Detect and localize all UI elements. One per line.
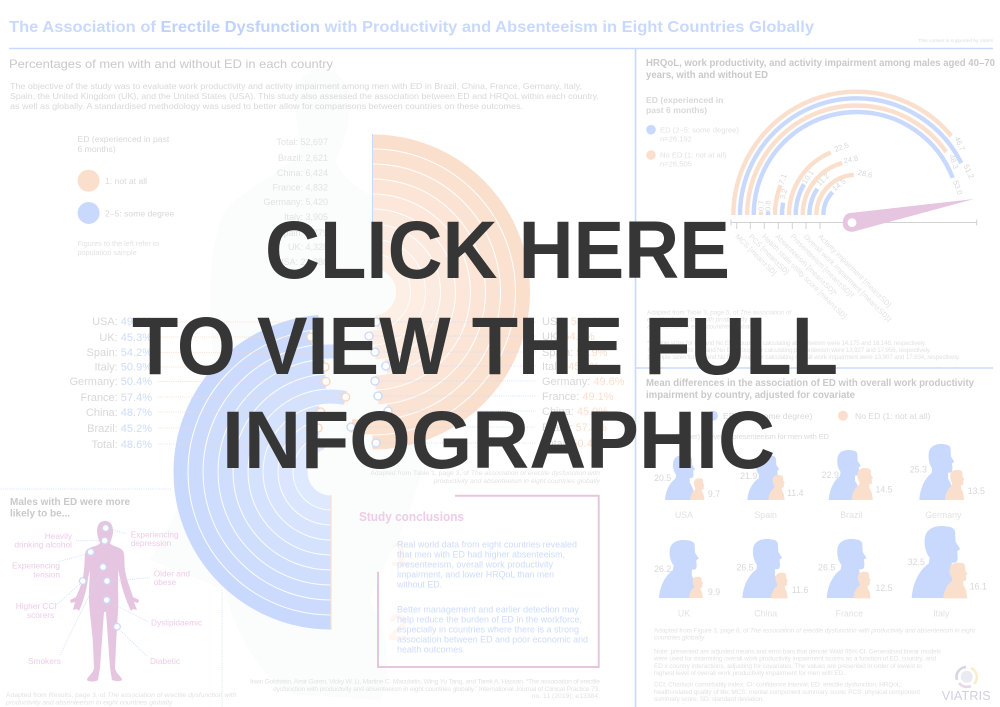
heading: mean differences: Mean differences in the association of ED with overall work productivity — [646, 378, 974, 389]
axis labels — [734, 232, 894, 324]
silhouette values: 11.6 — [792, 585, 808, 595]
silhouette values: 26.5 — [818, 562, 835, 572]
population labels: Spain: 3,779 — [277, 228, 328, 238]
silhouette values: 12.5 — [875, 583, 893, 593]
conclusion 2: health outcomes. — [397, 644, 465, 654]
axis labels: Activity impairment [mean±SD] — [816, 232, 893, 309]
legend: HRQoL: past 6 months) — [646, 105, 707, 115]
call to action overlay: CLICK HERE — [265, 205, 730, 296]
axis labels: Absenteeism [mean±SD]* — [774, 232, 839, 298]
panel: study conclusions — [359, 496, 599, 667]
body labels: drinking alcohol — [14, 540, 72, 550]
conclusion 2: especially in countries where there is a strong — [397, 624, 579, 634]
body labels: obese — [154, 577, 177, 587]
silhouette values: 9.9 — [708, 587, 720, 597]
country percentages: ED — [69, 316, 152, 451]
body labels: Smokers — [28, 656, 61, 666]
notes: highest level of overall work productivity impairment for men with ED. — [654, 670, 845, 677]
objective text: The objective of the study was to evaluate work productivity and activity impairment among men with ED in Brazil, China, France, Germany, Italy, — [10, 81, 582, 91]
country percentages: ED: UK: 45.3% — [99, 332, 152, 344]
silhouette values: 32.5 — [908, 557, 925, 567]
population labels: USA: 21,388 — [277, 257, 328, 267]
country percentages: ED: Total: 48.6% — [91, 439, 152, 451]
country percentages: ED: Brazil: 45.2% — [87, 423, 152, 435]
country percentages: no ED: UK: 54.8% — [542, 331, 595, 343]
body markers — [79, 525, 120, 630]
source: table 1: productivity and absenteeism in eight countries globally — [433, 478, 601, 485]
body labels: scorers — [27, 610, 54, 620]
legend: mean differences — [654, 411, 931, 441]
legend: population chart: ED (experienced in past — [78, 134, 170, 144]
arc value labels: 0.8 — [763, 200, 772, 211]
arc value labels — [756, 135, 976, 211]
ring end markers — [307, 318, 392, 448]
conclusion 2: help reduce the burden of ED in the workforce, — [397, 614, 582, 624]
body labels: Experiencing — [12, 561, 60, 571]
conclusion 1 — [396, 540, 577, 590]
source: table 1: Adapted from Table 1, page 3, of The association of erectile dysfunction with — [370, 470, 600, 477]
body labels: Experiencing — [131, 530, 179, 540]
country percentages: no ED: Brazil: 57.2% — [542, 422, 607, 434]
source: table 3 — [647, 310, 960, 361]
numeral 2: 2 — [388, 607, 408, 648]
conclusion 1: presenteeism, overall work productivity — [397, 560, 553, 570]
radial chart: ED — [180, 322, 482, 630]
heading: HRQoL: years, with and without ED — [646, 70, 768, 81]
country percentages: no ED: Total: 50.4% — [542, 438, 603, 450]
country percentages: no ED: China: 45.9% — [542, 406, 608, 418]
arc value labels: 48.3 — [947, 153, 961, 170]
country names: USA — [675, 510, 693, 520]
conclusion 1: without ED. — [396, 580, 442, 590]
source: table 3: *Sample sizes for ED and No ED groups for calculating absenteeism were 14,175 and 18,148, respectively. — [647, 340, 926, 347]
country percentages: no ED: France: 49.1% — [542, 391, 614, 403]
body labels: Diabetic — [150, 656, 180, 666]
silhouette values: 25.3 — [910, 464, 927, 474]
notes: summary score; SD: standard deviation. — [654, 696, 764, 703]
conclusion 1: impairment, and lower HRQoL than men — [397, 570, 554, 580]
country percentages: no ED: Germany: 49.6% — [542, 376, 625, 388]
legend: population chart: 2–5: some degree — [105, 208, 174, 218]
axis labels: Presenteeism [mean±SD]† — [789, 232, 857, 300]
body labels: tension — [33, 569, 60, 579]
legend: HRQoL — [646, 95, 739, 168]
title: The Association of Erectile Dysfunction with Productivity and Absenteeism in Eight Countries Globally — [9, 19, 814, 36]
source: table 1 — [370, 470, 601, 485]
notes: were used for examining overall work productivity impairment scores as a function of ED, country, and — [653, 656, 936, 663]
country percentages: ED: Germany: 50.4% — [69, 376, 152, 388]
body labels: Heavily — [45, 531, 73, 541]
leader lines: ED percentages — [158, 322, 346, 444]
heading: HRQoL — [646, 58, 995, 81]
notes: Adapted from Figure 3, page 8, of The association of erectile dysfunction with productivity and absenteeism in eight — [654, 628, 976, 634]
arc value labels: 46.7 — [953, 135, 967, 152]
body labels: Dyslipidaemic — [151, 618, 202, 628]
legend: mean differences: Y-axis (higher) = level of presenteeism for men with ED — [654, 432, 830, 441]
heading: percentages: Percentages of men with and without ED in each country — [9, 57, 333, 71]
country names: China — [754, 609, 777, 619]
population labels: Italy: 3,905 — [284, 212, 328, 222]
legend: mean differences: ED (2–5: some degree) — [723, 411, 812, 421]
legend: HRQoL: n=26,192 — [660, 134, 692, 144]
legend: HRQoL: ED (experienced in — [646, 95, 723, 105]
legend: HRQoL: n=26,505 — [660, 160, 692, 168]
radial chart: no ED — [222, 134, 523, 442]
population labels: UK: 4,328 — [288, 242, 328, 252]
objective text: as well as globally. A standardised methodology was used to better allow for comparisons between countries on these outcomes. — [10, 101, 523, 111]
silhouette values: 21.9 — [740, 471, 757, 481]
arc value labels: 22.5 — [833, 140, 850, 154]
country names: Germany — [925, 510, 962, 520]
country percentages: ED: Italy: 50.9% — [94, 362, 152, 374]
panel: study conclusions: Study conclusions — [359, 510, 464, 524]
source: table 3: erectile dysfunction with productivity and — [647, 316, 760, 324]
body labels — [12, 530, 202, 666]
axis labels: PCS [mean±SD] — [747, 232, 791, 276]
silhouette values: 13.5 — [968, 486, 985, 496]
legend: population chart: Figures to the left refer to — [78, 239, 159, 248]
population labels: France: 4,832 — [272, 182, 328, 192]
country percentages: ED: France: 57.4% — [80, 392, 152, 404]
population labels: Brazil: 2,621 — [278, 153, 328, 163]
country percentages: no ED: USA: 51.4% — [542, 316, 602, 328]
country percentages: no ED: Spain: 50.9% — [542, 347, 608, 359]
country percentages: no ED — [542, 316, 625, 450]
country percentages: ED: Spain: 54.2% — [87, 347, 152, 359]
country names: Spain — [754, 510, 777, 520]
legend: population chart — [78, 134, 174, 257]
source: results — [5, 692, 237, 706]
source: table 3: ‡Sample sizes for ED and No ED groups for calculating overall work impairment were 13,907 and 17,934, respectively. — [647, 354, 960, 361]
country names — [675, 510, 962, 619]
body labels: Older and — [154, 569, 191, 579]
objective text: Spain, the United Kingdom (UK), and the United States (USA). This study also assessed the association between ED and HRQoL within each country, — [10, 91, 599, 101]
body labels: Higher CCI — [16, 601, 57, 611]
panel: risk factors: likely to be... — [10, 508, 70, 520]
country names: France — [836, 609, 863, 619]
numeral 1: 1 — [390, 533, 410, 574]
arc value labels: 7.1 — [777, 173, 789, 186]
legend: HRQoL: No ED (1: not at all) — [660, 150, 727, 160]
logo: Viatris — [942, 667, 991, 703]
silhouettes: ED — [659, 444, 960, 598]
legend: population chart: 1: not at all — [105, 176, 147, 186]
arc axis — [731, 220, 977, 229]
silhouette values: 9.7 — [708, 489, 720, 499]
source: table 3: absenteeism in eight countries globally — [647, 324, 756, 330]
population labels: China: 6,424 — [277, 168, 328, 178]
notes: Note: presented are adjusted means and error bars that denote Wald 95% CI. Generalised linear models — [654, 648, 942, 656]
source: results: productivity and absenteeism in eight countries globally — [5, 700, 173, 706]
axis labels: Health state utility score [mean±SD] — [760, 232, 849, 320]
source: table 3: †Sample sizes for ED and No ED groups for calculating presenteeism were 13,927 and 17,956, respectively. — [647, 347, 931, 354]
arc value labels: 14.5 — [830, 177, 848, 193]
axis labels: MCS [mean±SD] — [734, 232, 779, 277]
conclusion 1: Real world data from eight countries revealed — [397, 540, 577, 550]
silhouette values: 11.4 — [787, 488, 804, 498]
arc value labels: 53.0 — [951, 179, 965, 196]
call to action overlay — [132, 205, 838, 486]
country percentages: ED: USA: 49.1% — [92, 316, 152, 328]
arc value labels: 51.2 — [962, 163, 976, 180]
panel: risk factors: Males with ED were more — [10, 497, 130, 508]
silhouette values — [654, 464, 987, 597]
logo: Viatris: VIATRIS — [942, 689, 991, 703]
leader lines: no ED percentages — [351, 322, 536, 443]
legend: mean differences: No ED (1: not at all) — [855, 411, 931, 421]
call to action overlay: INFOGRAPHIC — [222, 395, 775, 486]
silhouette values: 20.5 — [654, 473, 671, 483]
country names: Brazil — [840, 510, 862, 520]
arc value labels: 0.7 — [756, 200, 765, 211]
notes: ED x country interactions, adjusting for covariates. The values are presented in order of lowest to — [654, 663, 922, 670]
conclusion 2: association between ED and poor economic and — [397, 634, 588, 644]
country names: UK — [678, 609, 690, 619]
source: table 3: Adapted from Table 3, page 5, of The association of — [647, 310, 792, 316]
conclusion 1: that men with ED had higher absenteeism, — [397, 550, 565, 560]
citation — [250, 678, 600, 700]
citation: dysfunction with productivity and absenteeism in eight countries globally.” International Journal of Clinical Practice 73, — [273, 686, 600, 693]
country percentages: no ED: Italy: 45.9% — [542, 361, 600, 373]
conclusion 2 — [397, 604, 588, 654]
heading: mean differences — [646, 378, 974, 401]
population labels — [263, 137, 328, 267]
citation: Irwin Goldstein, Amir Goren, Vicky W. Li, Martine C. Maculaitis, Wing Yu Tang, and Tarek A. Hassan. “The association of erectile — [250, 678, 600, 686]
silhouette values: 16.1 — [970, 582, 987, 592]
icon: human body — [70, 521, 139, 682]
heading: mean differences: impairment by country, adjusted for covariate — [646, 390, 855, 401]
citation: no. 11 (2019): e13384. — [532, 693, 600, 700]
arc value labels: 11.2 — [815, 171, 831, 188]
notes: CCI: Charlson comorbidity index; CI: confidence interval; ED: erectile dysfunction; HRQoL: — [654, 682, 902, 689]
support note: This content is supported by Viatris — [918, 38, 994, 44]
objective text — [10, 81, 599, 111]
arc value labels: 28.6 — [857, 168, 873, 180]
legend: HRQoL: ED (2–5: some degree) — [660, 126, 739, 134]
body labels: depression — [131, 538, 172, 548]
silhouette values: 14.5 — [875, 484, 893, 494]
silhouette values: 26.2 — [654, 564, 671, 574]
leader lines: body — [56, 530, 150, 657]
country percentages: ED: China: 48.7% — [86, 407, 152, 419]
population labels: Total: 52,697 — [276, 137, 328, 147]
axis labels: Overall work impairment [mean±SD]‡ — [802, 232, 894, 324]
silhouettes: no ED — [689, 468, 968, 598]
country names: Italy — [933, 609, 950, 619]
silhouette values: 22.9 — [822, 470, 839, 480]
arc value labels: 10.1 — [800, 168, 816, 186]
legend: population chart: 6 months) — [78, 144, 116, 154]
notes — [653, 628, 976, 703]
panel: risk factors — [0, 489, 222, 707]
pointer — [843, 199, 974, 232]
arc chart: HRQoL — [733, 92, 980, 338]
legend: population chart: population sample — [78, 248, 137, 257]
notes: countries globally — [654, 635, 705, 642]
arc value labels: 24.8 — [843, 154, 859, 165]
conclusion 2: Better management and earlier detection may — [397, 604, 579, 614]
call to action overlay: TO VIEW THE FULL — [132, 301, 838, 392]
source: results: Adapted from Results, page 3, of The association of erectile dysfunction with — [6, 692, 237, 699]
silhouette values: 26.5 — [736, 562, 754, 572]
notes: health-related quality of life; MCS: mental component summary score; PCS: physical component — [654, 689, 920, 696]
arc value labels: 3.2 — [778, 188, 789, 200]
population labels: Germany: 5,420 — [263, 197, 328, 207]
